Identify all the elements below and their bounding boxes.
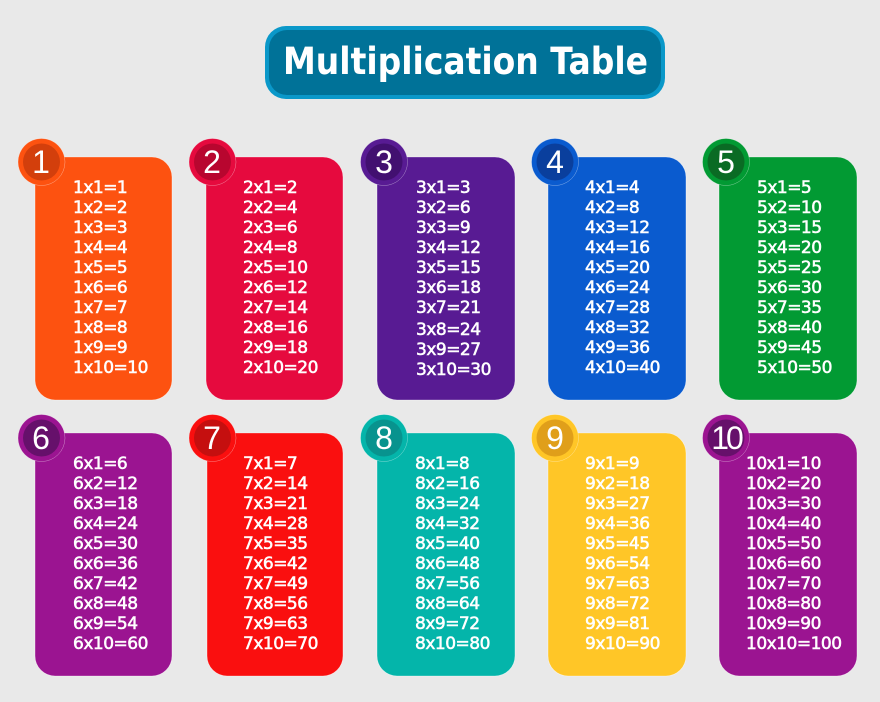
icon: number 9 badge — [532, 414, 578, 462]
times table 3: 3x4=12 — [416, 238, 481, 258]
panel: table of 4 — [532, 138, 686, 400]
title banner — [265, 26, 665, 99]
icon: number 9 badge: 9 — [546, 420, 564, 456]
times table 2: 2x10=20 — [243, 358, 318, 378]
times table 7: 7x1=7 — [243, 454, 297, 474]
times table 3: 3x3=9 — [416, 218, 470, 238]
times table 7 — [243, 454, 318, 654]
icon: number 4 badge: 4 — [546, 144, 564, 180]
times table 8: 8x9=72 — [415, 614, 480, 634]
times table 9: 9x1=9 — [585, 454, 639, 474]
times table 7: 7x6=42 — [243, 554, 308, 574]
times table 6: 6x9=54 — [73, 614, 138, 634]
icon: number 10 badge: 10 — [711, 420, 743, 456]
times table 5: 5x1=5 — [757, 178, 811, 198]
times table 7: 7x8=56 — [243, 594, 308, 614]
times table 9: 9x2=18 — [585, 474, 650, 494]
times table 4: 4x2=8 — [585, 198, 639, 218]
panel: table of 7 — [189, 414, 343, 676]
icon: number 6 badge: 6 — [32, 420, 50, 456]
times table 9: 9x10=90 — [585, 634, 660, 654]
icon: number 1 badge: 1 — [32, 144, 50, 180]
times table 9: 9x9=81 — [585, 614, 650, 634]
times table 6: 6x5=30 — [73, 534, 138, 554]
times table 5: 5x9=45 — [757, 338, 822, 358]
times table 4: 4x8=32 — [585, 318, 650, 338]
times table 2: 2x7=14 — [243, 298, 308, 318]
times table 2: 2x8=16 — [243, 318, 308, 338]
times table 7: 7x7=49 — [243, 574, 308, 594]
times table 8: 8x6=48 — [415, 554, 480, 574]
times table 6 — [73, 454, 148, 654]
times table 5: 5x4=20 — [757, 238, 822, 258]
times table 3: 3x8=24 — [416, 320, 481, 340]
times table 10: 10x6=60 — [746, 554, 821, 574]
times table 8: 8x4=32 — [415, 514, 480, 534]
times table 3: 3x10=30 — [416, 360, 491, 380]
times table 4: 4x5=20 — [585, 258, 650, 278]
times table 1: 1x2=2 — [73, 198, 127, 218]
times table 7: 7x9=63 — [243, 614, 308, 634]
times table 8: 8x10=80 — [415, 634, 490, 654]
times table 10: 10x5=50 — [746, 534, 821, 554]
times table 1: 1x6=6 — [73, 278, 127, 298]
times table 1: 1x4=4 — [73, 238, 127, 258]
times table 6: 6x7=42 — [73, 574, 138, 594]
panel: table of 5 — [702, 138, 857, 400]
times table 1: 1x1=1 — [73, 178, 127, 198]
times table 10: 10x3=30 — [746, 494, 821, 514]
icon: number 3 badge — [360, 138, 408, 186]
times table 7: 7x5=35 — [243, 534, 308, 554]
times table 2: 2x3=6 — [243, 218, 297, 238]
icon: number 1 badge — [18, 138, 65, 186]
times table 6: 6x2=12 — [73, 474, 138, 494]
title text: Multiplication Table — [283, 40, 648, 83]
times table 7: 7x10=70 — [243, 634, 318, 654]
icon: number 7 badge — [189, 414, 236, 462]
times table 5: 5x8=40 — [757, 318, 822, 338]
times table 9: 9x5=45 — [585, 534, 650, 554]
times table 5: 5x2=10 — [757, 198, 822, 218]
times table 3: 3x5=15 — [416, 258, 481, 278]
times table 8: 8x7=56 — [415, 574, 480, 594]
times table 10: 10x10=100 — [746, 634, 842, 654]
times table 6: 6x6=36 — [73, 554, 138, 574]
times table 5 — [757, 178, 832, 378]
times table 5: 5x3=15 — [757, 218, 822, 238]
times table 8: 8x8=64 — [415, 594, 480, 614]
times table 5: 5x7=35 — [757, 298, 822, 318]
panel: table of 6 — [18, 414, 172, 676]
times table 4: 4x1=4 — [585, 178, 639, 198]
times table 2 — [243, 178, 318, 378]
times table 1: 1x7=7 — [73, 298, 127, 318]
times table 1: 1x3=3 — [73, 218, 127, 238]
times table 9 — [585, 454, 660, 654]
times table 2: 2x5=10 — [243, 258, 308, 278]
times table 2: 2x6=12 — [243, 278, 308, 298]
times table 1: 1x8=8 — [73, 318, 127, 338]
panel: table of 3 — [360, 138, 515, 400]
times table 6: 6x3=18 — [73, 494, 138, 514]
times table 3: 3x2=6 — [416, 198, 470, 218]
times table 7: 7x3=21 — [243, 494, 308, 514]
times table 4: 4x7=28 — [585, 298, 650, 318]
panel: table of 10 — [702, 414, 857, 676]
times table 9: 9x7=63 — [585, 574, 650, 594]
times table 9: 9x8=72 — [585, 594, 650, 614]
panel: table of 9 — [532, 414, 686, 676]
times table 3: 3x6=18 — [416, 278, 481, 298]
times table 2: 2x4=8 — [243, 238, 297, 258]
times table 3 — [416, 178, 491, 380]
times table 8: 8x3=24 — [415, 494, 480, 514]
times table 9: 9x4=36 — [585, 514, 650, 534]
times table 5: 5x5=25 — [757, 258, 822, 278]
times table 2: 2x1=2 — [243, 178, 297, 198]
icon: number 7 badge: 7 — [203, 420, 221, 456]
times table 6: 6x10=60 — [73, 634, 148, 654]
times table 1 — [73, 178, 148, 378]
times table 3: 3x7=21 — [416, 298, 481, 318]
times table 4: 4x3=12 — [585, 218, 650, 238]
times table 8 — [415, 454, 490, 654]
times table 4: 4x6=24 — [585, 278, 650, 298]
times table 8: 8x5=40 — [415, 534, 480, 554]
icon: number 2 badge — [189, 138, 236, 186]
times table 10: 10x7=70 — [746, 574, 821, 594]
times table 5: 5x6=30 — [757, 278, 822, 298]
times table 10: 10x4=40 — [746, 514, 821, 534]
times table 8: 8x1=8 — [415, 454, 469, 474]
times table 3: 3x1=3 — [416, 178, 470, 198]
panel: table of 2 — [189, 138, 343, 400]
times table 1: 1x10=10 — [73, 358, 148, 378]
times table 10: 10x1=10 — [746, 454, 821, 474]
times table 8: 8x2=16 — [415, 474, 480, 494]
panel: table of 1 — [18, 138, 172, 400]
times table 6: 6x4=24 — [73, 514, 138, 534]
times table 4 — [585, 178, 660, 378]
times table 1: 1x9=9 — [73, 338, 127, 358]
times table 5: 5x10=50 — [757, 358, 832, 378]
icon: number 8 badge — [360, 414, 408, 462]
times table 2: 2x9=18 — [243, 338, 308, 358]
times table 4: 4x10=40 — [585, 358, 660, 378]
times table 10: 10x2=20 — [746, 474, 821, 494]
icon: number 5 badge — [702, 138, 750, 186]
icon: number 10 badge — [702, 414, 750, 462]
times table 6: 6x1=6 — [73, 454, 127, 474]
times table 10: 10x9=90 — [746, 614, 821, 634]
times table 6: 6x8=48 — [73, 594, 138, 614]
icon: number 5 badge: 5 — [717, 144, 735, 180]
times table 3: 3x9=27 — [416, 340, 481, 360]
times table 10 — [746, 454, 842, 654]
times table 4: 4x4=16 — [585, 238, 650, 258]
times table 1: 1x5=5 — [73, 258, 127, 278]
times table 7: 7x2=14 — [243, 474, 308, 494]
icon: number 3 badge: 3 — [375, 144, 393, 180]
icon: number 6 badge — [18, 414, 65, 462]
icon: number 8 badge: 8 — [375, 420, 393, 456]
panel: table of 8 — [360, 414, 515, 676]
times table 2: 2x2=4 — [243, 198, 297, 218]
times table 4: 4x9=36 — [585, 338, 650, 358]
times table 9: 9x6=54 — [585, 554, 650, 574]
icon: number 4 badge — [532, 138, 578, 186]
times table 7: 7x4=28 — [243, 514, 308, 534]
icon: number 2 badge: 2 — [203, 144, 221, 180]
times table 9: 9x3=27 — [585, 494, 650, 514]
times table 10: 10x8=80 — [746, 594, 821, 614]
